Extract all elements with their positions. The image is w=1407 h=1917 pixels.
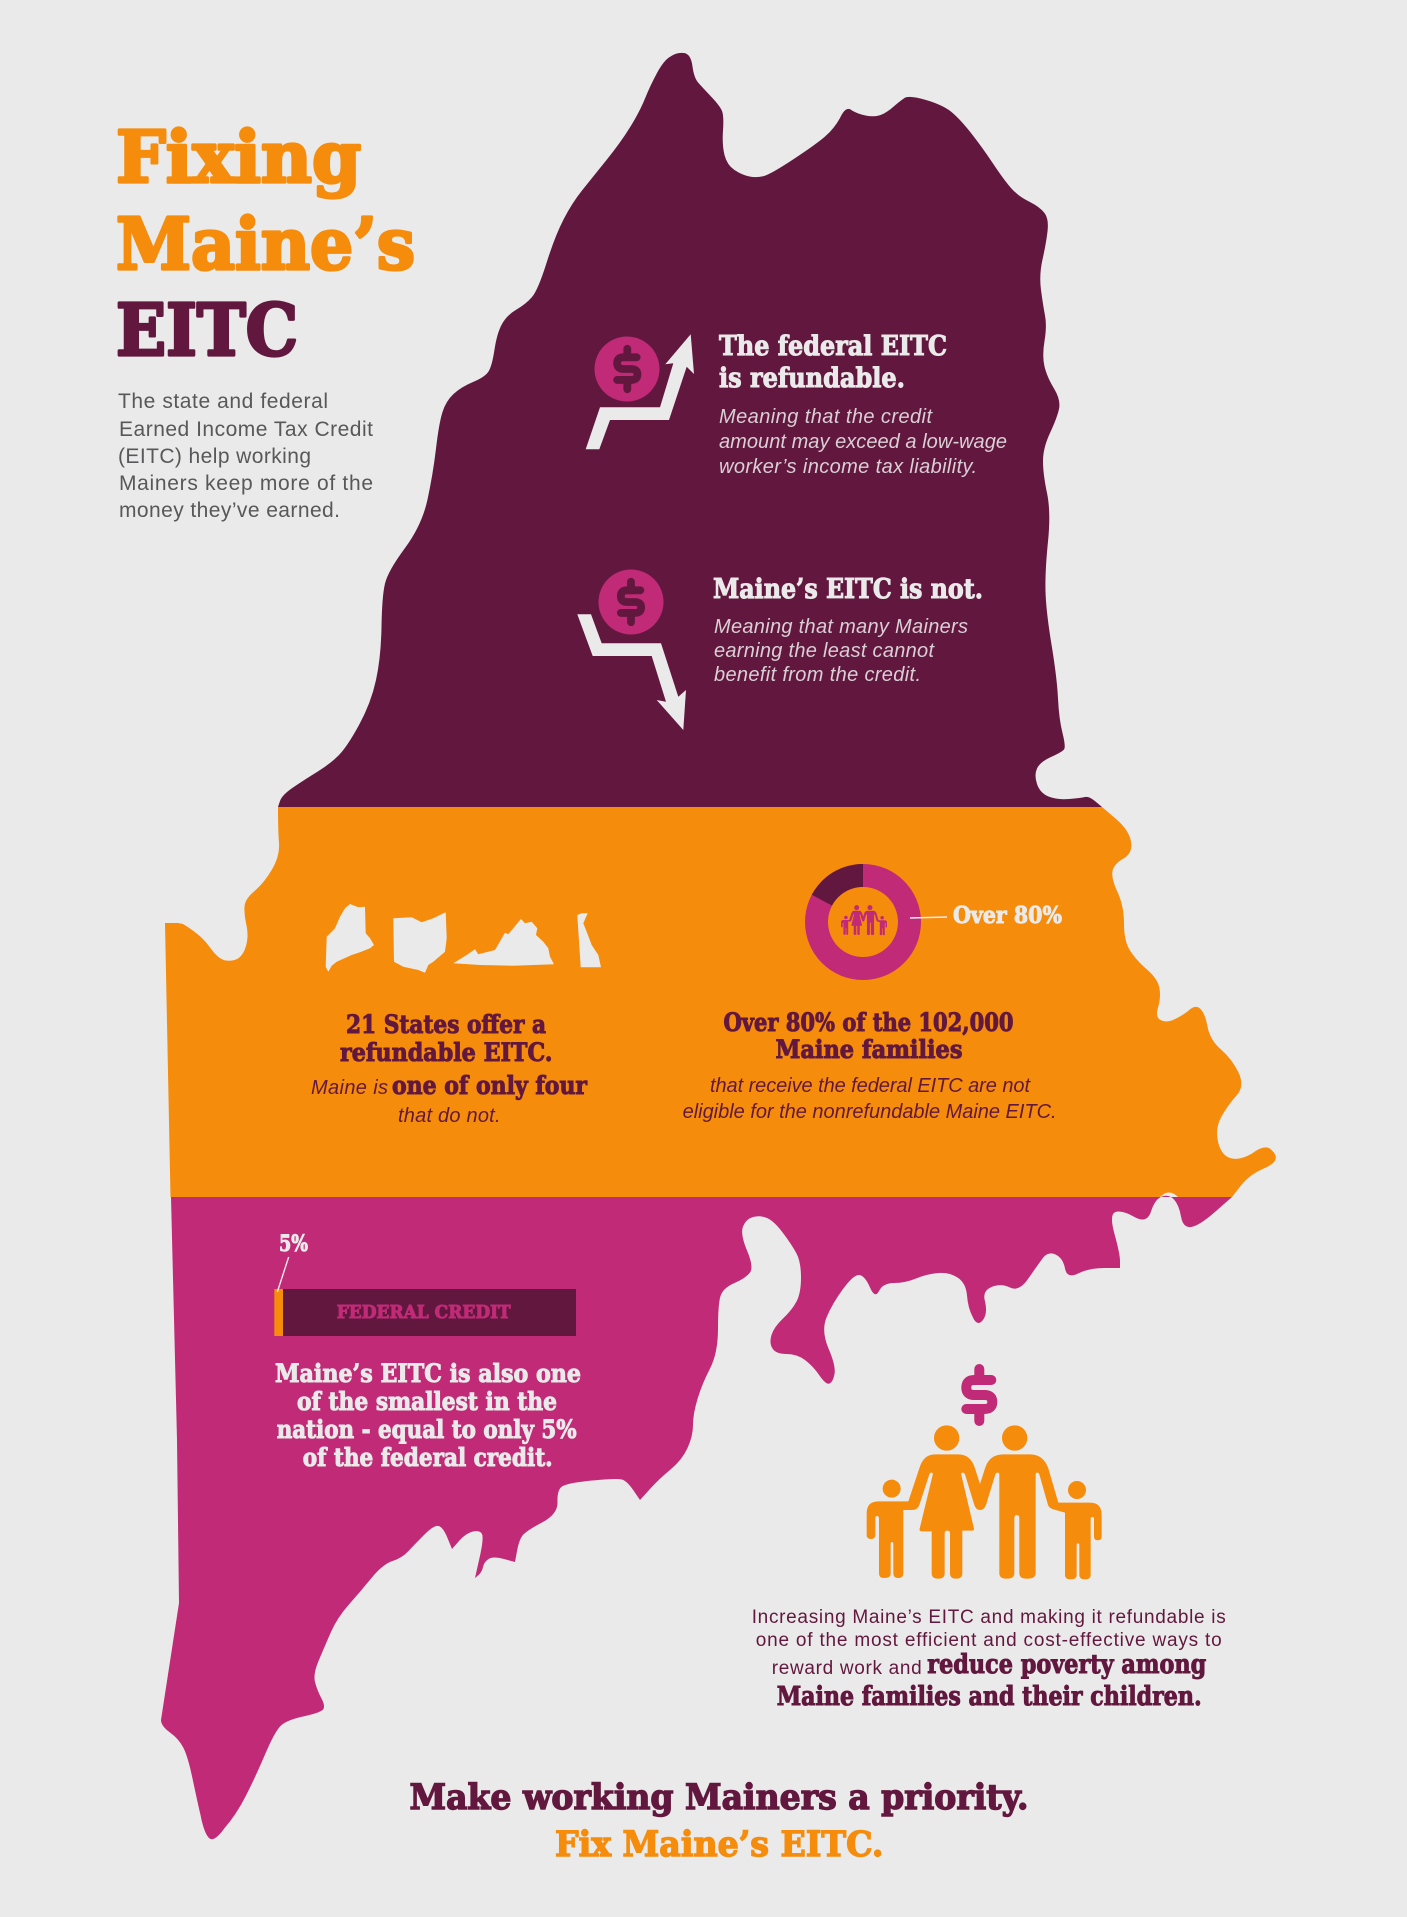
bar chart: 5 percent of federal credit: 5% — [279, 1231, 308, 1257]
intro text block: Earned Income Tax Credit — [119, 418, 373, 441]
credit size text block: of the smallest in the — [297, 1387, 557, 1416]
families text block — [683, 1008, 1057, 1123]
federal EITC text block: worker’s income tax liability. — [719, 456, 977, 478]
closing call to action: Make working Mainers a priority. — [410, 1777, 1028, 1818]
states text block: 21 States offer a — [346, 1010, 546, 1039]
text block: reform benefits: reward work and — [772, 1658, 922, 1679]
icon: dollar sign — [966, 1369, 992, 1421]
states text block — [311, 1010, 588, 1127]
federal EITC text block: amount may exceed a low-wage — [719, 431, 1007, 453]
Maine EITC text block: Maine’s EITC is not. — [713, 574, 983, 605]
families text block: eligible for the nonrefundable Maine EITC. — [683, 1101, 1057, 1123]
icon: four state silhouettes — [326, 904, 601, 973]
federal EITC text block: Meaning that the credit — [719, 406, 933, 428]
intro text block: The state and federal — [118, 390, 328, 413]
states text block: one of only four — [392, 1071, 588, 1100]
Maine EITC text block — [713, 574, 983, 686]
credit size text block: Maine’s EITC is also one — [275, 1359, 581, 1388]
Maine EITC text block: benefit from the credit. — [714, 664, 921, 686]
closing call to action — [410, 1777, 1028, 1865]
bar chart: 5 percent of federal credit: FEDERAL CREDIT — [337, 1302, 511, 1323]
text block: reform benefits: reduce poverty among — [927, 1650, 1206, 1680]
credit size text block: nation - equal to only 5% — [277, 1415, 577, 1444]
states text block: Maine is — [311, 1077, 388, 1099]
text block: reform benefits: Increasing Maine’s EITC and making it refundable is — [752, 1607, 1226, 1628]
intro text block — [118, 390, 373, 522]
Maine EITC text block: earning the least cannot — [714, 640, 935, 662]
panel: central Maine (state comparison and share of families) — [165, 807, 1276, 1197]
text block: reform benefits — [752, 1607, 1226, 1712]
icon: family holding hands — [867, 1425, 1102, 1579]
title: EITC — [116, 288, 298, 372]
panel: southern Maine (credit size) — [161, 1196, 1232, 1839]
text block: reform benefits: one of the most efficient and cost-effective ways to — [756, 1630, 1222, 1651]
states text block: refundable EITC. — [340, 1038, 552, 1067]
title — [116, 115, 415, 372]
families text block: Over 80% of the 102,000 — [724, 1008, 1014, 1037]
credit size text block — [275, 1359, 581, 1472]
families text block: Maine families — [776, 1035, 962, 1064]
title: Maine’s — [116, 202, 415, 286]
families text block: that receive the federal EITC are not — [710, 1075, 1031, 1097]
intro text block: Mainers keep more of the — [119, 472, 373, 495]
federal EITC text block — [719, 331, 1007, 478]
intro text block: money they’ve earned. — [119, 499, 340, 522]
federal EITC text block: The federal EITC — [719, 331, 947, 362]
bar chart: 5 percent of federal credit — [274, 1231, 576, 1336]
icon: small family — [841, 905, 887, 935]
icon: coin with rising arrow — [586, 334, 694, 449]
icon: coin with falling arrow — [577, 570, 686, 730]
credit size text block: of the federal credit. — [303, 1443, 553, 1472]
panel: northern Maine (refundability comparison) — [278, 53, 1102, 807]
states text block: that do not. — [398, 1105, 500, 1127]
text block: reform benefits: Maine families and their children. — [777, 1682, 1202, 1712]
closing call to action: Fix Maine’s EITC. — [555, 1824, 884, 1865]
intro text block: (EITC) help working — [118, 445, 311, 468]
title: Fixing — [116, 115, 361, 199]
federal EITC text block: is refundable. — [719, 363, 905, 394]
Maine EITC text block: Meaning that many Mainers — [714, 616, 968, 638]
donut chart: over 80 percent — [805, 864, 921, 980]
callout: over 80 percent: Over 80% — [953, 902, 1062, 929]
